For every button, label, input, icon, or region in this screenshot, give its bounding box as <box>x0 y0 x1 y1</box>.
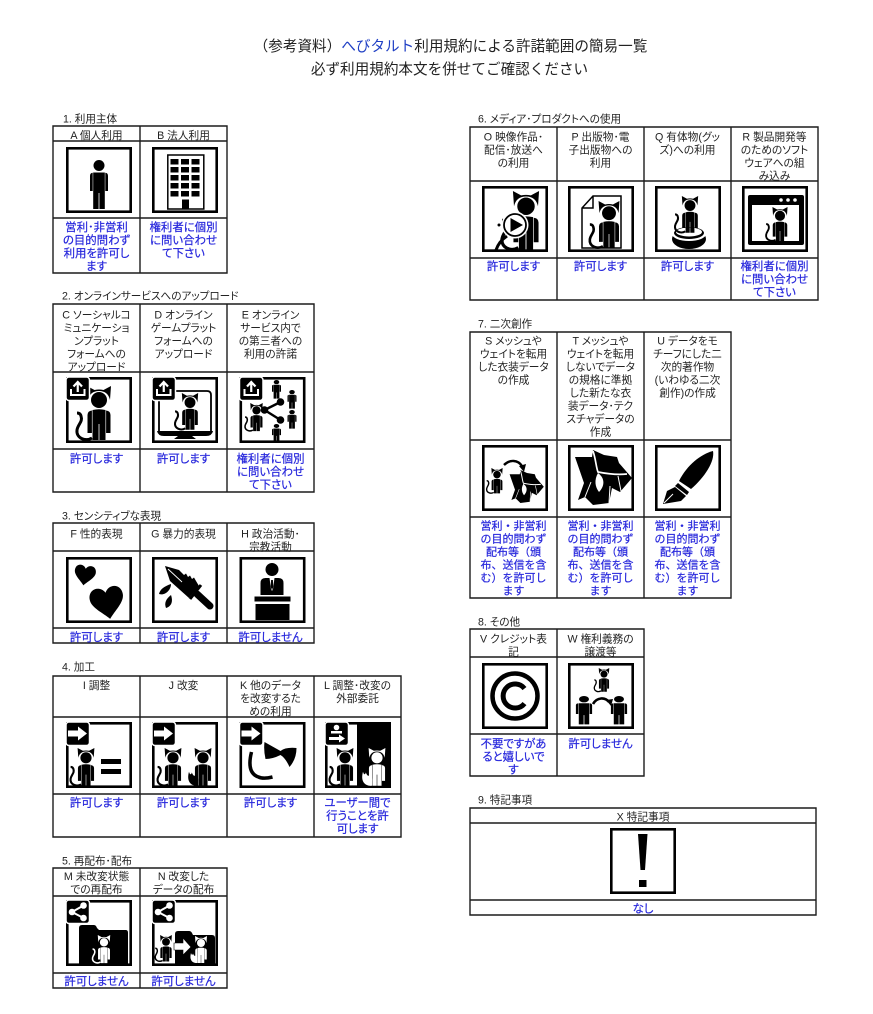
panel: 6. メディア・プロダクトへの使用 <box>470 112 818 300</box>
table grid <box>53 126 227 273</box>
column headers: P 出版物･電 <box>572 132 630 144</box>
icon: exclamation mark <box>611 829 675 893</box>
header E: E オンライン <box>242 310 299 322</box>
panel: 5. 再配布・配布 <box>53 856 227 988</box>
table grid <box>53 676 401 837</box>
permission text S: の目的問わず <box>480 532 546 546</box>
column headers: N 改変した <box>158 871 209 883</box>
icon: outsourcing <box>325 722 391 788</box>
header C: アップロード <box>68 362 126 374</box>
header U: (いわゆる二次 <box>655 374 721 386</box>
column headers: M 未改変状態 <box>64 871 129 883</box>
permission text U: 営利・非営利 <box>654 520 720 532</box>
icon: speaker at lectern <box>241 558 304 622</box>
permission text M N: 許可しません <box>64 974 129 988</box>
column headers: B 法人利用 <box>157 130 210 142</box>
column headers: 子出版物への <box>569 144 632 156</box>
heading: 8. その他 <box>478 616 521 628</box>
header T: ウェイトを転用 <box>567 348 634 360</box>
permission text S: 布、送信を含 <box>480 558 546 572</box>
header U: U データをモ <box>657 336 718 348</box>
icon: fountain pen <box>656 446 720 510</box>
column headers: ズ)への利用 <box>659 144 715 156</box>
column headers <box>64 870 215 896</box>
heading: 7. 二次創作 <box>478 318 533 330</box>
header D: ゲームプラット <box>151 322 216 334</box>
heading: 1. 利用主体 <box>63 114 118 126</box>
icon: hearts <box>67 558 131 622</box>
icon: goods on stand <box>656 187 720 251</box>
header C: ミュニケーショ <box>64 322 129 334</box>
header E: 利用の許諾 <box>244 348 297 360</box>
permission text R: て下さい <box>753 286 796 299</box>
permission text S: ます <box>502 584 524 598</box>
panel: 3. センシティブな表現 <box>53 510 314 644</box>
panel: 2. オンラインサービスへのアップロード <box>53 290 314 492</box>
panel: 1. 利用主体 <box>53 114 227 273</box>
permission text F G H: 許可しません <box>238 630 303 644</box>
column headers: ウェアへの組 <box>744 156 805 170</box>
permission text T: 布、送信を含 <box>568 558 634 572</box>
permission text A: 利用を許可し <box>64 246 130 260</box>
permission text U: 布、送信を含 <box>654 558 720 572</box>
table grid <box>470 629 644 776</box>
permission text W: 許可しません <box>568 736 633 750</box>
permission text I J K: 許可します <box>157 796 210 810</box>
icon: video <box>483 187 547 251</box>
column headers: F 性的表現 <box>70 528 123 540</box>
header T: 装データ･テク <box>568 400 633 412</box>
header C: フォームへの <box>67 348 126 360</box>
permission text V: す <box>508 764 519 776</box>
permission text T: む）を許可し <box>568 570 634 584</box>
heading: 9. 特記事項 <box>478 794 533 806</box>
column headers: のためのソフト <box>741 144 808 156</box>
column headers: 外部委託 <box>336 692 379 705</box>
column headers: データの配布 <box>152 883 215 896</box>
header T: スチャデータの <box>566 412 635 426</box>
heading: 3. センシティブな表現 <box>62 510 162 522</box>
permission text A: ます <box>86 260 107 273</box>
permission text T: の目的問わず <box>568 532 634 546</box>
permission text S: 営利・非営利 <box>480 520 546 532</box>
permission text M N: 許可しません <box>151 974 216 988</box>
permission text F G H <box>70 630 303 644</box>
permission text B: に問い合わせ <box>150 234 217 247</box>
header T: しないでデータ <box>566 360 635 374</box>
icon: knife <box>153 558 217 622</box>
column header: X 特記事項 <box>617 810 670 824</box>
column headers <box>484 130 808 182</box>
title <box>254 37 647 78</box>
permission text A: の目的問わず <box>63 233 130 247</box>
table grid <box>53 523 314 643</box>
permission text B: て下さい <box>162 247 205 260</box>
panel: 4. 加工 <box>53 662 401 837</box>
icon: modification <box>152 722 217 787</box>
column headers: Q 有体物(グッ <box>655 132 720 144</box>
permission text F G H: 許可します <box>70 630 123 644</box>
heading: 2. オンラインサービスへのアップロード <box>62 290 239 302</box>
permission text E: に問い合わせ <box>237 466 304 478</box>
icon: monitor upload <box>152 377 217 442</box>
header S: した衣装データ <box>478 360 549 374</box>
permission text L: 行うことを許 <box>326 808 389 822</box>
icon: parts reuse <box>240 722 304 787</box>
icon: modified data distribution <box>152 900 217 965</box>
icon: software window <box>743 187 807 251</box>
column headers: 利用 <box>590 158 611 170</box>
table grid <box>470 332 731 598</box>
column headers: での再配布 <box>70 884 123 896</box>
permission text O P Q: 許可します <box>487 259 540 273</box>
column headers: 譲渡等 <box>584 646 617 658</box>
header T: の規格に準拠 <box>569 374 632 386</box>
permission text U: む）を許可し <box>654 570 720 584</box>
header S: ウェイトを転用 <box>480 348 547 360</box>
icon: cat share with third parties <box>240 377 304 442</box>
column headers <box>70 528 300 554</box>
permission text O P Q: 許可します <box>661 259 714 273</box>
header U: 次的著作物 <box>661 360 715 374</box>
header T: した新たな衣 <box>570 388 631 400</box>
permission text D: 許可します <box>157 452 210 466</box>
column headers: H 政治活動･ <box>241 528 300 540</box>
permission text U: ます <box>676 584 698 598</box>
column headers: I 調整 <box>83 679 110 692</box>
column headers: R 製品開発等 <box>742 132 807 144</box>
permission text I J K: 許可します <box>244 796 297 810</box>
column headers: を改変するた <box>240 692 301 705</box>
icon: clothing <box>569 446 633 510</box>
header D: アップロード <box>155 348 213 360</box>
title: （参考資料）へびタルト利用規約による許諾範囲の簡易一覧 <box>254 37 647 55</box>
table grid <box>470 808 816 915</box>
heading: 4. 加工 <box>62 662 95 674</box>
permission text V: ると嬉しいで <box>482 750 545 764</box>
column headers: O 映像作品･ <box>484 132 543 144</box>
permission text U: の目的問わず <box>654 532 720 546</box>
column headers: の利用 <box>497 158 529 170</box>
permission text A: 営利･非営利 <box>65 222 128 234</box>
permission text O P Q: 許可します <box>574 259 627 273</box>
permission text L: 可します <box>337 822 378 836</box>
panel: 8. その他 <box>470 616 644 776</box>
permission text R: 権利者に個別 <box>741 261 808 273</box>
header E: の第三者への <box>239 334 302 348</box>
icon: person <box>67 148 131 212</box>
header S: の作成 <box>497 374 530 386</box>
column headers: W 権利義務の <box>567 634 634 646</box>
header S: S メッシュや <box>485 336 542 348</box>
header E: サービス内で <box>240 322 301 334</box>
header T: 作成 <box>590 426 611 438</box>
header C: ンプラット <box>74 336 119 348</box>
column headers: 記 <box>508 646 519 658</box>
table grid <box>53 868 227 988</box>
table grid <box>53 304 314 492</box>
header U: 創作)の作成 <box>659 388 716 400</box>
column headers <box>70 129 210 142</box>
permission text O P Q <box>487 259 714 273</box>
permission text X: なし <box>633 902 654 916</box>
column headers: み込み <box>759 170 791 182</box>
column headers: A 個人利用 <box>70 129 123 142</box>
icon: cat upload <box>66 377 131 442</box>
column headers <box>83 679 391 718</box>
icon: cat to clothing <box>483 446 547 510</box>
column headers: J 改変 <box>169 679 199 692</box>
column headers <box>480 632 634 658</box>
permission text B: 権利者に個別 <box>150 222 217 234</box>
panel: 7. 二次創作 <box>470 318 731 598</box>
header D: D オンライン <box>154 310 213 322</box>
permission text V: 不要ですがあ <box>481 738 546 750</box>
panel: 9. 特記事項 <box>470 794 816 916</box>
permission text F G H: 許可します <box>157 630 210 644</box>
column headers: K 他のデータ <box>240 680 301 692</box>
column headers: 宗教活動 <box>249 540 292 554</box>
permission text R: に問い合わせ <box>741 273 808 286</box>
header C: C ソーシャルコ <box>62 310 131 322</box>
column headers: 配信･放送へ <box>484 144 543 156</box>
column headers: G 暴力的表現 <box>151 528 216 540</box>
permission text S: む）を許可し <box>480 570 546 584</box>
permission text E: て下さい <box>249 478 292 492</box>
icon: copyright <box>483 664 547 728</box>
icon: redistribution folder <box>66 900 131 965</box>
icon: adjustment equals <box>66 722 131 787</box>
header D: フォームへの <box>154 336 213 348</box>
heading: 5. 再配布･配布 <box>62 856 132 868</box>
permission text E: 権利者に個別 <box>237 454 304 466</box>
permission text T: ます <box>590 584 612 598</box>
title: 必ず利用規約本文を併せてご確認ください <box>311 61 588 78</box>
heading: 6. メディア･プロダクトへの使用 <box>478 112 621 126</box>
permission text T: 営利・非営利 <box>568 520 634 532</box>
icon: building <box>153 148 217 212</box>
column headers: めの利用 <box>249 706 292 718</box>
permission text L: ユーザー間で <box>324 798 391 810</box>
permission text C: 許可します <box>70 452 123 466</box>
permission text U: 配布等（頒 <box>660 544 715 558</box>
permission text T: 配布等（頒 <box>573 544 628 558</box>
column headers: V クレジット表 <box>480 634 547 646</box>
table grid <box>470 127 818 300</box>
header T: T メッシュや <box>572 336 629 348</box>
permission text I J K <box>70 796 297 810</box>
permission text M N <box>64 974 216 988</box>
permission text S: 配布等（頒 <box>486 544 541 558</box>
icon: publication <box>569 187 633 251</box>
column headers: L 調整･改変の <box>324 680 391 692</box>
header U: チーフにした二 <box>653 348 722 360</box>
permission text I J K: 許可します <box>70 796 123 810</box>
icon: transfer of rights <box>569 664 633 728</box>
